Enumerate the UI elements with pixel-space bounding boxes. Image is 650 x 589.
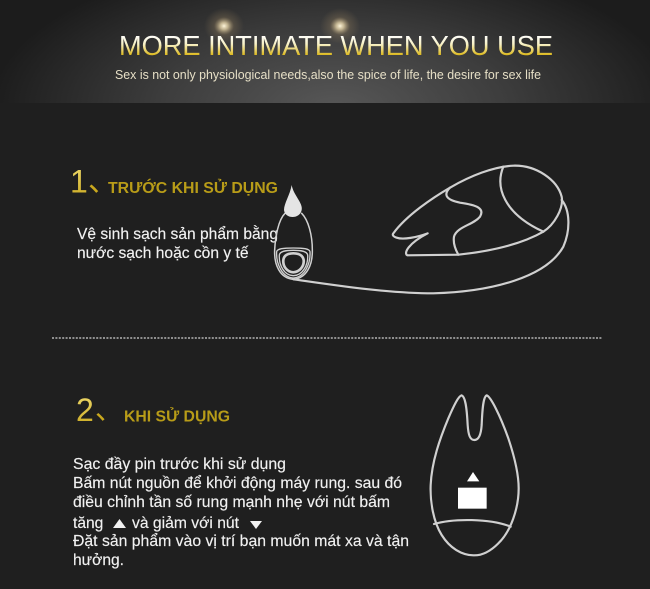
- section 2 text block: Sạc đầy pin trước khi sử dụng: [73, 456, 286, 473]
- section 1 heading: 1: [70, 164, 88, 200]
- section 1 text block: nước sạch hoặc cồn y tế: [77, 245, 249, 262]
- section 2 text block: tăng: [73, 515, 103, 532]
- section 2 text block: Đặt sản phẩm vào vị trí bạn muốn mát xa và tận: [73, 532, 409, 550]
- dotted divider: [52, 337, 602, 339]
- icon: water drop: [284, 185, 302, 217]
- icon: up arrow on product: [467, 472, 479, 481]
- section 2 heading: 2: [76, 392, 94, 428]
- icon: up arrow: [113, 519, 126, 528]
- icon: down arrow: [250, 521, 262, 529]
- illustration: product front view: [431, 395, 519, 555]
- section 1 heading: [70, 164, 278, 200]
- title: MORE INTIMATE WHEN YOU USE: [119, 30, 553, 61]
- section 2 heading: 、: [95, 394, 123, 425]
- icon: power button: [458, 488, 487, 509]
- product outline: [431, 395, 519, 555]
- section 2 text block: và giảm với nút: [132, 515, 240, 532]
- section 2 text block: điều chỉnh tần số rung mạnh nhẹ với nút bấm: [73, 494, 390, 511]
- section 1 heading: 、: [88, 165, 118, 198]
- section 2 heading: [76, 392, 230, 428]
- section 2 text block: hưởng.: [73, 552, 124, 569]
- section 2 text block: [73, 456, 409, 569]
- product outline: [293, 166, 568, 293]
- section 1 text block: [77, 224, 278, 262]
- panel: header banner: [0, 0, 650, 103]
- section 1 heading: TRƯỚC KHI SỬ DỤNG: [108, 178, 278, 197]
- ring loop: [275, 213, 312, 279]
- section 2 heading: KHI SỬ DỤNG: [124, 406, 230, 426]
- section 2 text block: Bấm nút nguồn để khởi động máy rung. sau đó: [73, 474, 402, 492]
- subtitle: Sex is not only physiological needs,also the spice of life, the desire for sex life: [115, 68, 541, 82]
- section 1 text block: Vệ sinh sạch sản phẩm bằng: [77, 224, 278, 243]
- illustration: product with cleaning water drop: [275, 166, 568, 293]
